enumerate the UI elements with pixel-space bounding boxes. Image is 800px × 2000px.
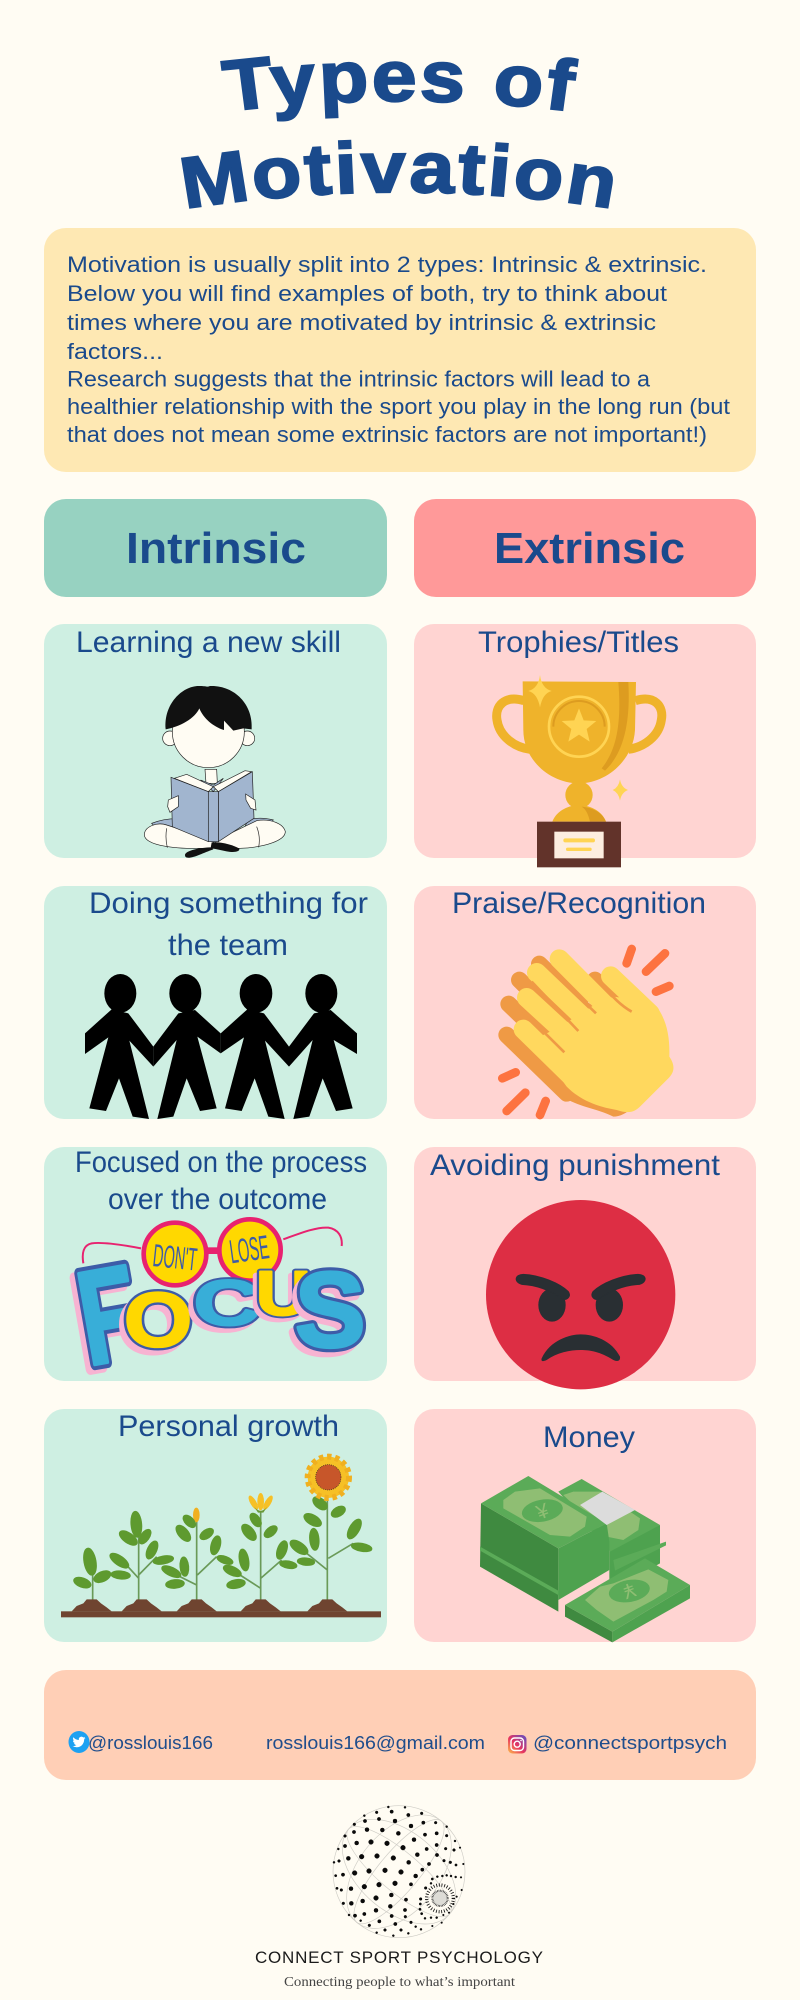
logo sphere [323,1795,475,1948]
panel: contact details [44,1670,756,1780]
icon: don't lose focus sticker: LOSE [227,1229,271,1271]
icon: instagram [508,1735,526,1754]
panel: introduction: factors... [67,339,163,364]
icon: don't lose focus sticker: O [124,1276,192,1364]
heading: intrinsic: Intrinsic [126,524,306,573]
tagline: Connecting people to what’s important [284,1975,515,1990]
logo: connect sport psychology [255,1795,543,1990]
panel: trophies/titles [414,624,756,867]
icon: don't lose focus sticker: F [68,1238,150,1394]
icon: don't lose focus sticker: C [193,1267,260,1339]
heading: intrinsic [44,499,387,597]
icon: angry face [486,1200,675,1389]
icon: don't lose focus sticker: O [119,1281,188,1368]
title: Motivation [181,140,613,209]
panel: avoiding punishment [414,1147,756,1389]
icon: don't lose focus sticker [63,1219,365,1399]
panel: introduction: that does not mean some extrinsic factors are not important!) [67,422,707,447]
icon: plant growth stages [61,1457,381,1617]
panel: introduction: healthier relationship with the sport you play in the long run (but [67,394,730,419]
instagram handle: @connectsportpsych [533,1733,727,1753]
email: rosslouis166@gmail.com [266,1733,485,1753]
icon: don't lose focus sticker: S [290,1256,361,1374]
icon: stacks of banknotes: ¥ [619,1577,639,1603]
icon: stacks of banknotes: ¥ [532,1499,553,1525]
panel: doing something for the team: Doing something for [89,887,368,920]
panel: doing something for the team [44,886,387,1119]
icon: don't lose focus sticker: U [256,1258,311,1328]
title: Types of [220,56,579,122]
heading: extrinsic: Extrinsic [494,524,685,573]
panel: personal growth: Personal growth [118,1410,339,1443]
icon: don't lose focus sticker: U [252,1262,307,1332]
panel: praise/recognition [414,886,756,1119]
icon: paper chain people [85,974,357,1119]
panel: focused on the process: over the outcome [108,1183,327,1216]
company name: CONNECT SPORT PSYCHOLOGY [255,1948,543,1967]
panel: praise/recognition: Praise/Recognition [452,887,706,920]
icon: stacks of banknotes [480,1476,690,1642]
panel: learning a new skill [44,624,387,858]
panel: avoiding punishment: Avoiding punishment [430,1149,721,1182]
icon: don't lose focus sticker: C [193,1267,260,1339]
twitter handle: @rosslouis166 [88,1733,213,1753]
icon: clapping hands [502,949,673,1117]
panel: money: Money [543,1421,635,1454]
icon: don't lose focus sticker: O [124,1276,192,1364]
panel: introduction: times where you are motivated by intrinsic & extrinsic [67,310,656,335]
icon: don't lose focus sticker: F [68,1238,150,1394]
icon: boy reading a book [144,686,285,858]
panel: introduction: Motivation is usually split into 2 types: Intrinsic & extrinsic. [67,252,707,277]
icon: don't lose focus sticker: C [189,1272,256,1343]
icon: don't lose focus sticker: S [295,1251,365,1370]
icon: gold trophy [497,675,662,867]
heading: extrinsic [414,499,756,597]
panel: introduction: Research suggests that the intrinsic factors will lead to a [67,366,651,392]
panel: personal growth [44,1409,387,1642]
icon: twitter [68,1731,90,1753]
panel: introduction: Below you will find examples of both, try to think about [67,281,667,306]
panel: focused on the process [44,1146,387,1399]
icon: don't lose focus sticker: S [295,1251,365,1370]
panel: trophies/titles: Trophies/Titles [478,626,679,659]
icon: don't lose focus sticker: F [63,1243,145,1399]
panel: focused on the process: Focused on the process [75,1146,367,1179]
panel: doing something for the team: the team [168,929,288,962]
title [181,56,613,209]
panel: introduction [44,228,756,472]
panel: money [414,1409,756,1642]
icon: don't lose focus sticker: U [256,1258,311,1328]
panel: learning a new skill: Learning a new skill [76,626,341,659]
icon: don't lose focus sticker: DON'T [151,1237,199,1278]
